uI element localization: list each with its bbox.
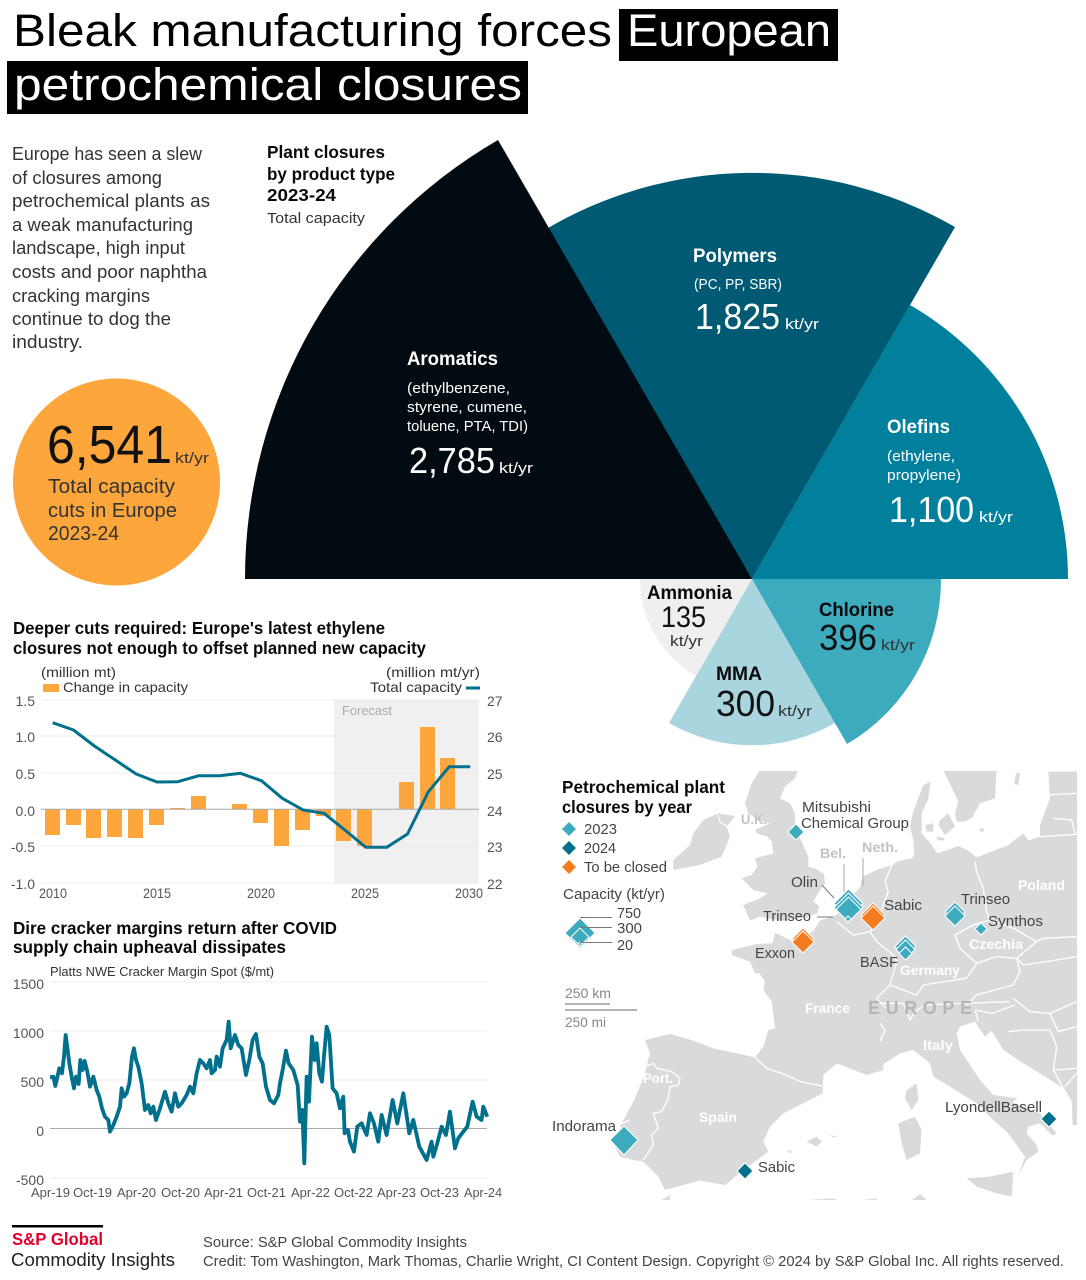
heading: plant closures by product type: by product type (267, 164, 395, 184)
map of Europe (615, 770, 1077, 1202)
source and credit: Source: S&P Global Commodity Insights (203, 1235, 467, 1251)
sector: MMA (669, 579, 835, 745)
marker: Trinseo Germany (945, 902, 965, 926)
heading: cracker margin chart (13, 918, 337, 957)
map plant labels: Exxon (755, 945, 795, 962)
x axis: 2015 (143, 885, 171, 901)
intro text block: costs and poor naphtha (12, 261, 208, 282)
heading: ethylene chart: Deeper cuts required: Europe's latest ethylene (13, 618, 385, 638)
label: aromatics: styrene, cumene, (407, 399, 527, 416)
intro text block: petrochemical plants as (12, 190, 210, 211)
label: chlorine: 396 (819, 617, 877, 658)
source and credit (203, 1235, 1064, 1270)
sector: aromatics (245, 140, 752, 579)
label: chlorine: Chlorine (819, 600, 894, 621)
map plant labels: Mitsubishi (802, 799, 871, 816)
legend and axis titles: (million mt/yr) (386, 664, 480, 680)
right axis: 27 (487, 693, 503, 709)
map country labels: Port. (643, 1070, 673, 1086)
bars: change in capacity (45, 727, 455, 846)
logo: S&P Global Commodity Insights: S&P Global (12, 1229, 103, 1249)
label: ammonia (647, 583, 732, 650)
intro text block: continue to dog the (12, 308, 171, 329)
sector: ammonia (640, 579, 752, 676)
title: European (627, 5, 831, 56)
x axis (31, 1185, 502, 1200)
line: margin series (50, 1022, 487, 1163)
marker: LyondellBasell (1041, 1111, 1057, 1127)
marker: Sabic Spain (737, 1163, 753, 1179)
map legend: To be closed (584, 859, 667, 876)
national borders: Italy and Balkans (880, 998, 1077, 1088)
x axis: 2020 (247, 885, 275, 901)
map legend: 300 (617, 920, 642, 937)
map legend: 750 (617, 905, 641, 922)
x axis: 2030 (455, 885, 483, 901)
label: olefins: (ethylene, (887, 448, 955, 465)
map country labels: France (805, 1000, 850, 1016)
label: chlorine (819, 600, 915, 658)
title: petrochemical closures (14, 59, 522, 110)
intro text block: a weak manufacturing (12, 214, 193, 235)
label: ammonia: 135 (661, 601, 706, 634)
x axis: Apr-20 (117, 1185, 156, 1200)
right axis: 24 (487, 803, 503, 819)
heading: ethylene chart (13, 618, 426, 658)
chart: ethylene capacity change and total capacity (11, 664, 503, 901)
y axis (13, 976, 44, 1188)
label: ammonia: kt/yr (670, 633, 703, 650)
left axis: 1.0 (16, 729, 35, 745)
x axis: Apr-24 (464, 1185, 502, 1200)
right axis: 25 (487, 766, 503, 782)
x axis: Oct-23 (420, 1185, 459, 1200)
legend and axis titles: Total capacity (370, 679, 462, 695)
left axis: 0.0 (16, 803, 35, 819)
x axis: Apr-23 (377, 1185, 416, 1200)
marker: Sabic Belgium (861, 903, 885, 930)
map country labels (643, 811, 1065, 1125)
chart: cracker margin line (13, 964, 502, 1200)
map scale bar (565, 985, 637, 1030)
logo: S&P Global Commodity Insights (11, 1225, 175, 1270)
intro text block: of closures among (12, 167, 162, 188)
map country labels: Neth. (862, 839, 898, 855)
map legend: Petrochemical plant (562, 777, 725, 797)
callout: total capacity cuts: 2023-24 (48, 523, 119, 545)
label: ammonia: Ammonia (647, 583, 732, 604)
x axis: Oct-19 (73, 1185, 112, 1200)
map country labels: Italy (923, 1037, 953, 1053)
x axis: Oct-22 (334, 1185, 373, 1200)
map plant labels: Sabic (758, 1159, 795, 1176)
label: aromatics: (ethylbenzene, (407, 380, 510, 397)
land: Britain, Ireland and northern France (673, 770, 883, 973)
heading: cracker margin chart: supply chain upheaval dissipates (13, 937, 286, 957)
left axis: 1.5 (16, 693, 35, 709)
right axis: 22 (487, 876, 503, 892)
intro text block: Europe has seen a slew (12, 143, 203, 164)
map legend (562, 777, 725, 954)
forecast band (334, 700, 479, 883)
land: Italy and Balkans (877, 967, 1077, 1202)
map legend: 2023 (584, 821, 617, 838)
map legend: closures by year (562, 797, 692, 817)
label: olefins: kt/yr (979, 509, 1013, 526)
map country labels: EUROPE (868, 998, 972, 1018)
callout: total capacity cuts (13, 378, 220, 586)
map legend: 2024 (584, 840, 616, 857)
label: aromatics (407, 349, 533, 481)
callout: total capacity cuts: cuts in Europe (48, 500, 177, 522)
label: aromatics: toluene, PTA, TDI) (407, 418, 528, 435)
label: MMA: 300 (716, 683, 775, 724)
map plant markers (610, 824, 1057, 1179)
x axis: 2010 (39, 885, 67, 901)
x axis: Apr-22 (291, 1185, 330, 1200)
map scale bar: 250 mi (565, 1014, 606, 1030)
land: central Europe and Baltic (877, 770, 1077, 973)
left axis: -1.0 (11, 876, 35, 892)
map legend: 20 (617, 937, 633, 954)
x axis: Oct-20 (161, 1185, 200, 1200)
legend and axis titles: Change in capacity (63, 679, 188, 695)
marker: Olin and Trinseo cluster (834, 889, 863, 922)
label: polymers (693, 246, 819, 337)
sector: olefins (752, 305, 1068, 579)
left axis: -0.5 (11, 839, 35, 855)
heading: plant closures by product type: Total capacity (267, 210, 366, 227)
map plant labels: BASF (860, 954, 898, 971)
marker: BASF (895, 936, 916, 960)
x axis: Apr-19 (31, 1185, 70, 1200)
map plant labels: Indorama (552, 1118, 617, 1135)
label: polymers: kt/yr (785, 316, 819, 333)
chart: radial sector chart of closures by product (245, 140, 1068, 745)
callout: total capacity cuts: 6,541 (47, 415, 172, 475)
heading: plant closures by product type: 2023-24 (267, 185, 336, 205)
forecast band: Forecast (342, 703, 392, 718)
legend and axis titles (41, 664, 480, 695)
label: MMA (716, 664, 812, 724)
x axis: Apr-21 (204, 1185, 243, 1200)
intro text block: landscape, high input (12, 237, 185, 258)
map country labels: Czechia (969, 936, 1023, 952)
map plant labels: LyondellBasell (945, 1099, 1042, 1116)
left axis: 0.5 (16, 766, 35, 782)
map plant labels: Trinseo (961, 891, 1010, 908)
right axis (487, 693, 503, 892)
y axis: 500 (21, 1074, 44, 1090)
y axis: 1000 (13, 1025, 44, 1041)
label: polymers: (PC, PP, SBR) (694, 276, 782, 293)
heading: cracker margin chart: Dire cracker margins return after COVID (13, 918, 337, 938)
label: MMA: MMA (716, 664, 762, 685)
marker: Synthos (975, 923, 987, 935)
national borders: Iberia (622, 1015, 823, 1160)
x axis: 2025 (351, 885, 379, 901)
sector: polymers (543, 173, 955, 579)
marker: Indorama (610, 1126, 638, 1155)
line: total capacity (53, 723, 470, 847)
legend and axis titles: (million mt) (41, 664, 116, 680)
callout: total capacity cuts: kt/yr (175, 450, 209, 467)
label: olefins: Olefins (887, 417, 950, 438)
map country labels: Poland (1018, 877, 1065, 893)
national border: Ireland (718, 815, 728, 827)
label: olefins (887, 417, 1013, 530)
y axis: 1500 (13, 976, 44, 992)
logo: S&P Global Commodity Insights: Commodity Insights (11, 1250, 175, 1270)
map plant labels: Olin (791, 874, 818, 891)
marker: Mitsubishi Chemical Group (788, 824, 804, 840)
land: Iberia and France (615, 967, 883, 1202)
map scale bar: 250 km (565, 985, 611, 1001)
map country labels: Spain (699, 1109, 737, 1125)
title (7, 5, 838, 114)
map plant labels: Synthos (988, 913, 1043, 930)
label: olefins: propylene) (887, 467, 961, 484)
label: aromatics: kt/yr (499, 460, 533, 477)
label: chlorine: kt/yr (881, 637, 915, 654)
label: polymers: 1,825 (695, 296, 780, 337)
map plant labels (552, 799, 1043, 1176)
sector: chlorine (752, 579, 941, 744)
heading: plant closures by product type (267, 142, 395, 227)
map country labels: Germany (900, 962, 960, 978)
national borders: central Europe (837, 793, 1077, 1012)
chart: cracker margin line: Platts NWE Cracker Margin Spot ($/mt) (50, 964, 274, 979)
map legend: Capacity (kt/yr) (563, 886, 665, 903)
heading: plant closures by product type: Plant closures (267, 142, 385, 162)
intro text block: industry. (12, 331, 83, 352)
intro text block (12, 143, 210, 352)
intro text block: cracking margins (12, 285, 150, 306)
map country labels: Bel. (820, 845, 846, 861)
right axis: 26 (487, 729, 503, 745)
y axis: -500 (16, 1172, 44, 1188)
x axis: Oct-21 (247, 1185, 286, 1200)
label: MMA: kt/yr (778, 703, 812, 720)
x axis (39, 885, 483, 901)
heading: ethylene chart: closures not enough to offset planned new capacity (13, 638, 426, 658)
left axis (11, 693, 35, 892)
label: polymers: Polymers (693, 246, 777, 267)
marker: Exxon (792, 928, 814, 953)
label: aromatics: 2,785 (409, 440, 495, 481)
map plant labels: Trinseo (763, 908, 811, 925)
callout: total capacity cuts: Total capacity (48, 476, 175, 498)
map plant labels: Chemical Group (801, 815, 909, 832)
right axis: 23 (487, 839, 503, 855)
label: aromatics: Aromatics (407, 349, 498, 370)
source and credit: Credit: Tom Washington, Mark Thomas, Charlie Wright, CI Content Design. Copyright © 2024 by S&P Global Inc. All rights reserved. (203, 1254, 1064, 1270)
label: olefins: 1,100 (889, 489, 974, 530)
title: Bleak manufacturing forces (13, 5, 612, 56)
map plant labels: Sabic (884, 897, 922, 914)
y axis: 0 (36, 1123, 44, 1139)
map country labels: U.K. (741, 811, 767, 827)
